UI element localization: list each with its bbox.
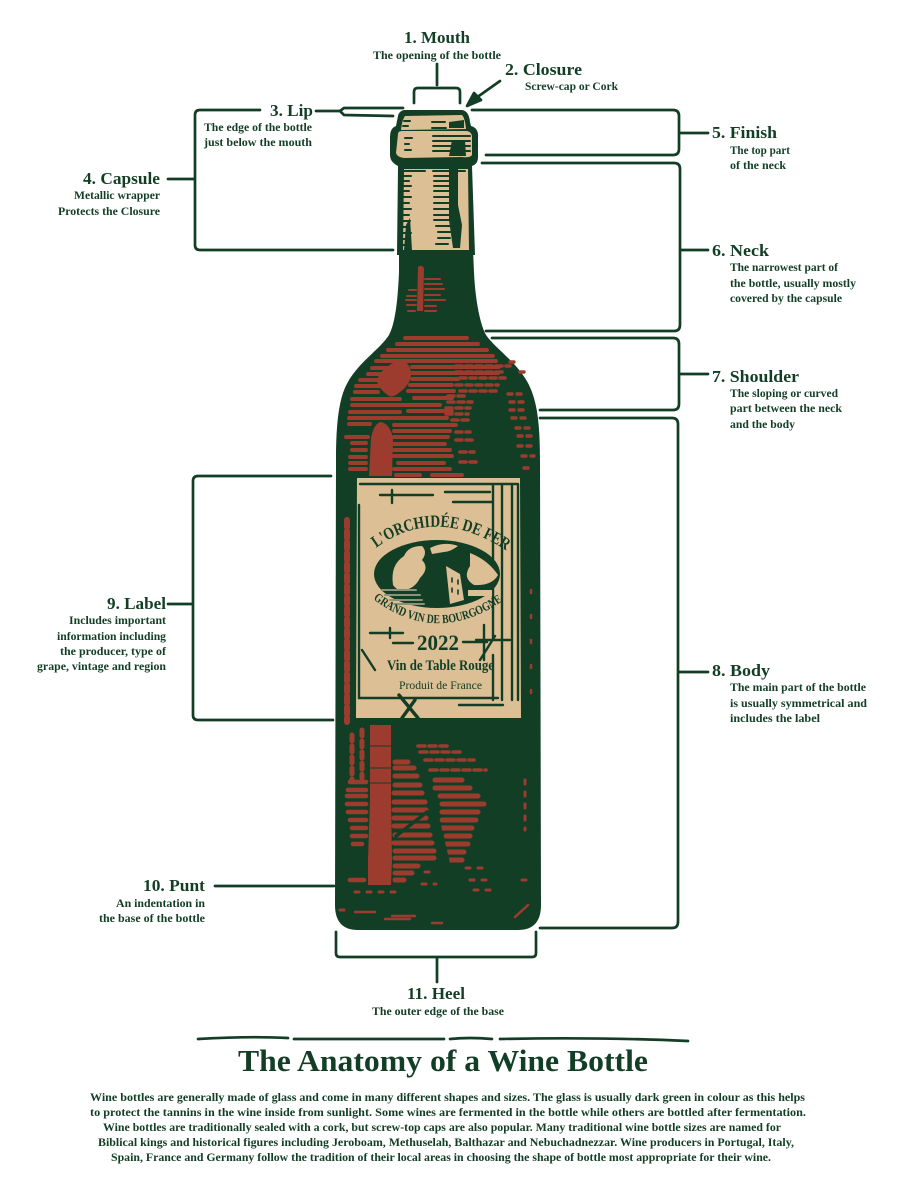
description paragraph: to protect the tannins in the wine inside from sunlight. Some wines are fermented in the bottle while others are bottled after fermentation. <box>90 1107 806 1119</box>
year: 2022 <box>417 630 459 655</box>
lower right dashes <box>418 746 486 770</box>
body bracket <box>540 418 708 928</box>
8 body: The main part of the bottle <box>730 682 866 694</box>
heel bracket <box>336 932 536 982</box>
5 finish <box>712 123 790 172</box>
lower middle hatch <box>394 762 484 880</box>
8 body: 8. Body <box>712 661 771 680</box>
highlight blob <box>377 361 411 396</box>
9 label <box>37 594 167 673</box>
9 label: grape, vintage and region <box>37 661 167 673</box>
label ruled frame <box>359 484 518 705</box>
title rule <box>198 1037 688 1041</box>
neck glint <box>417 266 424 311</box>
shoulder bracket <box>492 338 708 410</box>
3 lip <box>203 101 313 149</box>
title: The Anatomy of a Wine Bottle <box>238 1043 648 1078</box>
10 punt: 10. Punt <box>143 876 205 895</box>
4 capsule <box>58 169 160 218</box>
wine: right side dots <box>530 590 532 700</box>
base reflections <box>355 905 528 923</box>
capsule and lip <box>390 110 478 255</box>
winery name: L'ORCHIDÉE DE FER <box>370 512 510 550</box>
wine type: Vin de Table Rouge <box>387 658 494 674</box>
shoulder lines <box>346 338 499 475</box>
description paragraph: Wine bottles are traditionally sealed with a cork, but screw-top caps are also popular. Many traditional wine bottle sizes are named for <box>103 1122 781 1134</box>
castle windows <box>452 578 458 594</box>
description paragraph: Biblical kings and historical figures including Jeroboam, Methuselah, Balthazar and Nebuchadnezzar. Wine producers in Portugal, Italy, <box>98 1137 794 1149</box>
wine: lower hatching <box>340 725 530 923</box>
punt bar cracks <box>370 746 391 783</box>
2 closure <box>505 60 619 93</box>
lip fork <box>316 108 403 116</box>
closure arrow head <box>467 93 481 106</box>
7 shoulder: The sloping or curved <box>730 388 839 400</box>
bottle glass silhouette <box>335 250 541 930</box>
description paragraph: Wine bottles are generally made of glass and come in many different shapes and sizes. The glass is usually dark green in colour as this helps <box>90 1092 806 1104</box>
6 neck <box>712 241 856 305</box>
10 punt: An indentation in <box>116 898 206 910</box>
1 mouth: 1. Mouth <box>404 28 471 47</box>
6 neck: 6. Neck <box>712 241 770 260</box>
1 mouth <box>373 28 501 62</box>
label bracket <box>168 476 333 720</box>
11 heel: 11. Heel <box>407 984 465 1003</box>
3 lip: 3. Lip <box>270 101 313 120</box>
description paragraph <box>90 1092 806 1164</box>
capsule cream fill <box>396 115 472 250</box>
6 neck: The narrowest part of <box>730 262 838 274</box>
lower left dashes <box>352 730 362 780</box>
foreground hatching <box>382 590 424 604</box>
vignette illustration <box>374 540 500 608</box>
callout lines <box>168 64 708 982</box>
neck hatch <box>406 279 445 311</box>
8 body: is usually symmetrical and <box>730 698 868 710</box>
10 punt: the base of the bottle <box>99 913 205 925</box>
diagonal <box>396 770 448 862</box>
appellation: GRAND VIN DE BOURGOGNE <box>374 594 501 624</box>
9 label: information including <box>57 631 166 643</box>
6 neck: covered by the capsule <box>730 293 842 305</box>
castle <box>446 566 492 604</box>
capsule shading hatch <box>402 121 470 245</box>
capsule dark outline <box>390 110 478 255</box>
punt line <box>215 885 334 887</box>
year flourishes <box>370 628 487 643</box>
4 capsule: Metallic wrapper <box>74 190 160 202</box>
2 closure: 2. Closure <box>505 60 582 79</box>
9 label: Includes important <box>69 615 166 627</box>
punt bar <box>368 725 392 885</box>
vignette oval <box>374 540 500 608</box>
7 shoulder: and the body <box>730 419 795 431</box>
5 finish: of the neck <box>730 160 787 172</box>
neck bracket <box>482 163 708 331</box>
capsule dark shadow <box>404 120 466 250</box>
right side glints <box>508 362 534 468</box>
finish bracket <box>472 110 708 155</box>
8 body: includes the label <box>730 713 820 725</box>
lower scattered dots <box>340 780 530 910</box>
wine: left side dashes <box>344 520 350 722</box>
7 shoulder: part between the neck <box>730 403 843 415</box>
5 finish: The top part <box>730 145 790 157</box>
7 shoulder <box>712 367 843 431</box>
part labels <box>37 28 868 1018</box>
wine: neck highlight <box>406 266 445 311</box>
11 heel: The outer edge of the base <box>372 1006 504 1018</box>
wine: shoulder hatching <box>346 338 534 476</box>
shoulder dashes <box>446 366 510 462</box>
7 shoulder: 7. Shoulder <box>712 367 799 386</box>
4 capsule: 4. Capsule <box>83 169 160 188</box>
5 finish: 5. Finish <box>712 123 778 142</box>
9 label: the producer, type of <box>60 646 166 658</box>
capsule bracket <box>168 110 393 250</box>
1 mouth: The opening of the bottle <box>373 50 501 62</box>
label paper <box>356 478 521 718</box>
10 punt <box>99 876 206 925</box>
origin: Produit de France <box>399 678 482 692</box>
closure arrow <box>476 81 500 98</box>
9 label: 9. Label <box>107 594 166 613</box>
3 lip: just below the mouth <box>203 137 313 149</box>
label corner cross <box>399 695 418 718</box>
2 closure: Screw-cap or Cork <box>525 81 619 93</box>
4 capsule: Protects the Closure <box>58 206 160 218</box>
lower left hatch <box>347 782 366 880</box>
description paragraph: Spain, France and Germany follow the tradition of their local areas in choosing the shape of bottle most appropriate for their wine. <box>111 1152 771 1164</box>
8 body <box>712 661 868 725</box>
bottle label <box>356 478 521 718</box>
clouds <box>392 544 498 590</box>
highlight bar top <box>369 422 393 476</box>
11 heel <box>372 984 504 1018</box>
mouth bracket <box>414 64 460 103</box>
6 neck: the bottle, usually mostly <box>730 278 856 290</box>
wine bottle illustration <box>335 110 541 930</box>
3 lip: The edge of the bottle <box>204 122 312 134</box>
